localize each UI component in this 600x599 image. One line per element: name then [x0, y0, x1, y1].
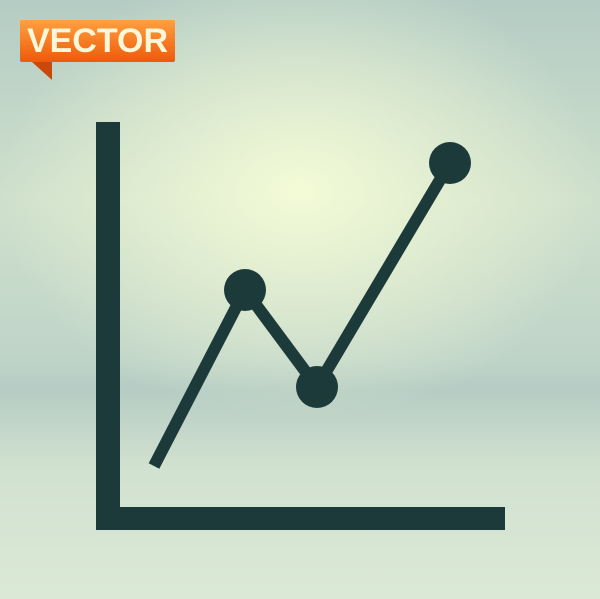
- badge: VECTOR: [20, 20, 175, 80]
- axes: [96, 122, 505, 530]
- data line: [154, 142, 471, 466]
- badge text: VECTOR: [27, 22, 168, 60]
